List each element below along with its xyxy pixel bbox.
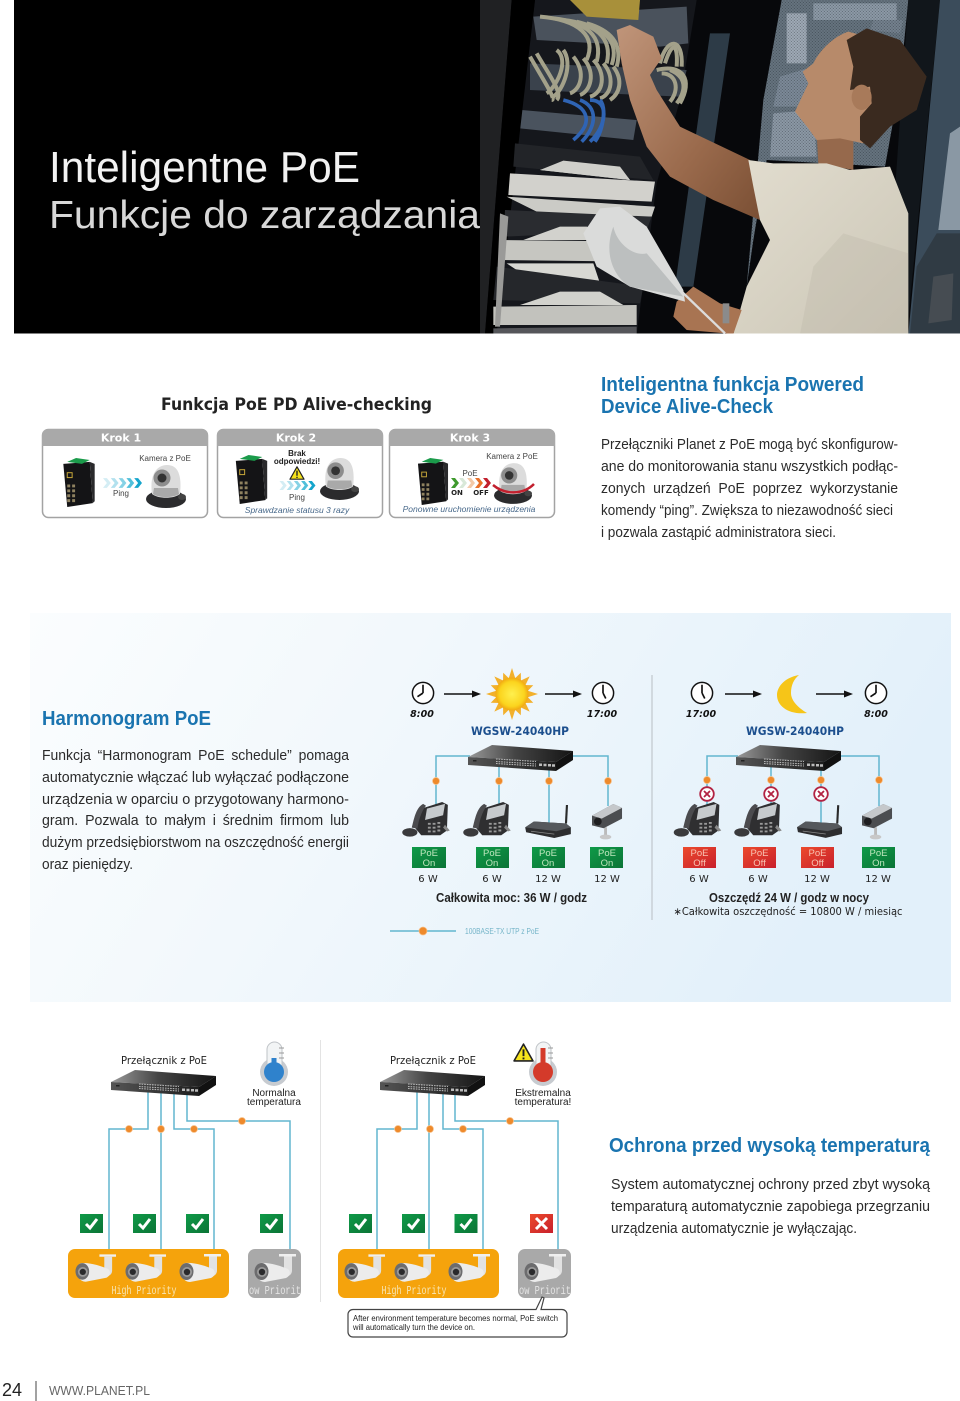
heading: alive-check: Inteligentna funkcja Powered (601, 374, 864, 396)
title: Funkcje do zarządzania (49, 194, 480, 237)
text block: alive-check description: Przełączniki Planet z PoE mogą być skonfigurow- (601, 437, 898, 453)
diagram: night schedule: On (872, 858, 885, 869)
diagram: daytime schedule: On (423, 858, 435, 869)
text block: schedule description (42, 748, 350, 873)
step 3: Ponowne uruchomienie urządzenia (403, 504, 536, 514)
diagram: night schedule: WGSW-24040HP (746, 724, 844, 738)
diagram: extreme temperature: temperatura! (515, 1097, 571, 1108)
icon: normal thermometer (260, 1042, 288, 1086)
diagram: extreme temperature: Ekstremalna (515, 1088, 571, 1099)
text block: schedule description: oraz pieniędzy. (42, 857, 133, 873)
diagram: daytime schedule (402, 668, 623, 905)
step 3: Krok 3 (450, 432, 490, 444)
legend: cable type: 100BASE-TX UTP z PoE (465, 927, 539, 936)
diagram: night schedule: Off (693, 858, 706, 869)
text block: alive-check description: ane do monitorowania stanu wszystkich podłąc- (601, 459, 898, 475)
diagram: daytime schedule: 6 W (482, 874, 502, 885)
diagram: normal temperature: ow Priorit (249, 1285, 301, 1298)
text block: alive-check description (601, 437, 898, 541)
panel: PoE schedule (30, 613, 951, 1002)
diagram: night schedule: 12 W (865, 874, 891, 885)
diagram: night schedule: 17:00 (686, 709, 717, 720)
diagram: night schedule: 6 W (689, 874, 709, 885)
icon: red cross (530, 1214, 553, 1233)
step 3: OFF (473, 489, 489, 497)
legend: cable type (390, 927, 539, 936)
panel: alive-checking diagram (42, 395, 555, 518)
step 2 (217, 429, 383, 518)
step 1: Krok 1 (101, 432, 141, 444)
diagram: daytime schedule: 17:00 (587, 709, 618, 720)
title: Inteligentne PoE (49, 143, 360, 192)
diagram: normal temperature: temperatura (247, 1097, 301, 1108)
diagram: daytime schedule: 12 W (594, 874, 620, 885)
diagram: daytime schedule: WGSW-24040HP (471, 724, 569, 738)
footer: 24 (2, 1380, 22, 1400)
diagram: daytime schedule: 12 W (535, 874, 561, 885)
diagram: night schedule: Off (811, 858, 824, 869)
text block: schedule description: automatycznie włączać lub wyłączać podłączone (42, 770, 349, 786)
diagram: extreme temperature (338, 1042, 571, 1337)
panel: overheating protection text (609, 1135, 931, 1237)
step 1 (42, 429, 208, 518)
footer: WWW.PLANET.PL (49, 1383, 150, 1398)
text block: overheating description: System automatycznej ochrony przed zbyt wysoką (611, 1177, 931, 1193)
diagram: night schedule: PoE (809, 848, 826, 859)
diagram: night schedule: PoE (870, 848, 887, 859)
step 1: Ping (113, 489, 129, 498)
text block: overheating description: temparaturą automatycznie zapobiega przegrzaniu (611, 1199, 930, 1215)
diagram: extreme temperature: ow Priorit (519, 1285, 571, 1298)
heading: overheating: Ochrona przed wysoką temperaturą (609, 1135, 931, 1157)
text block: schedule description: Funkcja “Harmonogram PoE schedule” pomaga (42, 748, 350, 764)
diagram: daytime schedule: On (542, 858, 554, 869)
text block: schedule description: urządzenia w oparciu o przygotowany harmono- (42, 792, 349, 808)
diagram: daytime schedule: Całkowita moc: 36 W / godz (436, 890, 587, 905)
text block: overheating description (611, 1177, 931, 1237)
text block: alive-check description: i pozwala zastąpić administratora sieci. (601, 525, 836, 541)
diagram: night schedule: PoE (751, 848, 768, 859)
heading: alive-checking: Funkcja PoE PD Alive-checking (161, 395, 432, 415)
diagram: night schedule: PoE (691, 848, 708, 859)
text block: overheating description: urządzenia automatycznie je wyłączając. (611, 1221, 857, 1237)
step 2: Ping (289, 493, 305, 502)
diagram: daytime schedule: PoE (483, 848, 501, 859)
footer (2, 1380, 150, 1401)
diagram: night schedule: 6 W (748, 874, 768, 885)
callout: auto recovery note (348, 1297, 567, 1337)
icon: sun (486, 668, 538, 720)
icon: hot thermometer (529, 1042, 557, 1086)
heading: schedule: Harmonogram PoE (42, 708, 211, 730)
diagram: normal temperature: Przełącznik z PoE (121, 1055, 207, 1067)
title (49, 143, 480, 237)
step 2: Krok 2 (276, 432, 316, 444)
icon: moon (777, 675, 807, 713)
diagram: daytime schedule: PoE (420, 848, 438, 859)
text block: schedule description: dużym przedsiębiorstwom na oszczędność energii (42, 835, 349, 851)
callout: auto recovery note: After environment temperature becomes normal, PoE switch (353, 1314, 558, 1323)
step 3: ON (451, 489, 463, 497)
panel: powered device alive-check text (601, 374, 898, 541)
step 2: Sprawdzanie statusu 3 razy (245, 505, 350, 515)
diagram: normal temperature: Normalna (252, 1088, 296, 1099)
diagram: normal temperature: High Priority (112, 1285, 177, 1298)
diagram: daytime schedule: PoE (539, 848, 557, 859)
diagram: daytime schedule: On (601, 858, 613, 869)
step 3: PoE (462, 469, 478, 478)
diagram: normal temperature (68, 1042, 301, 1298)
diagram: night schedule: 8:00 (864, 709, 888, 720)
diagram: night schedule: Oszczędź 24 W / godz w nocy (709, 890, 870, 905)
heading: alive-check (601, 374, 864, 418)
text block: alive-check description: komendy “ping”. Zwiększa to niezawodność sieci (601, 503, 893, 519)
step 3: Kamera z PoE (486, 452, 538, 461)
step 2: Brak (288, 449, 306, 458)
text block: schedule description: gram. Pozwala to małym i średnim firmom lub (42, 813, 349, 829)
hero banner photo (14, 0, 960, 334)
diagram: night schedule: 12 W (804, 874, 830, 885)
diagram: extreme temperature: High Priority (382, 1285, 447, 1298)
text block: alive-check description: zonych urządzeń PoE poprzez wykorzystanie (601, 481, 898, 497)
callout: auto recovery note: will automatically turn the device on. (352, 1323, 475, 1332)
diagram: extreme temperature: Przełącznik z PoE (390, 1055, 476, 1067)
diagram: daytime schedule: On (486, 858, 498, 869)
diagram: daytime schedule: PoE (598, 848, 616, 859)
diagram: night schedule (674, 675, 903, 918)
step 3 (389, 429, 555, 518)
step 2: odpowiedzi! (274, 457, 320, 466)
icon: warning (514, 1044, 533, 1061)
step 1: Kamera z PoE (139, 454, 191, 463)
diagram: night schedule: Off (753, 858, 766, 869)
diagram: daytime schedule: 8:00 (410, 709, 434, 720)
diagram: daytime schedule: 6 W (418, 874, 438, 885)
diagram: night schedule: ∗Całkowita oszczędność = 10800 W / miesiąc (674, 906, 903, 918)
heading: alive-check: Device Alive-Check (601, 396, 774, 418)
